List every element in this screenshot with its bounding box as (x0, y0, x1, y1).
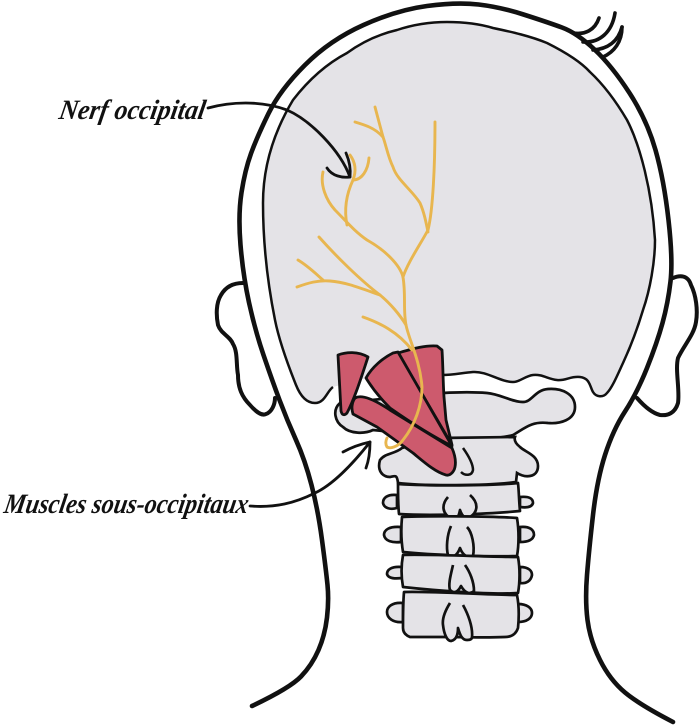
muscle: central (366, 352, 452, 446)
C2 spinous process (461, 448, 473, 475)
label: Muscles sous-occipitaux: Muscles sous-occipitaux (1, 489, 251, 520)
right ear (637, 276, 697, 415)
skull interior (263, 22, 655, 403)
muscle: lower oblique (352, 397, 455, 475)
left ear (217, 283, 275, 415)
head and neck outline (239, 4, 673, 722)
muscles sous-occipitaux (338, 346, 455, 475)
label: Nerf occipital: Nerf occipital (56, 95, 208, 126)
vertebra C3 (383, 483, 533, 519)
hair (573, 13, 622, 57)
vertebra C1 atlas (335, 389, 575, 438)
muscle: left triangular (338, 353, 368, 415)
arrow to muscles sous-occipitaux (250, 442, 370, 506)
vertebra C2 axis (379, 437, 538, 485)
arrow to nerf occipital (208, 103, 350, 177)
vertebra C4 (384, 516, 534, 557)
vertebra C5 (387, 555, 532, 593)
nerf occipital (297, 107, 435, 448)
vertebra C6 (387, 592, 532, 641)
muscle: large rear (398, 346, 452, 445)
